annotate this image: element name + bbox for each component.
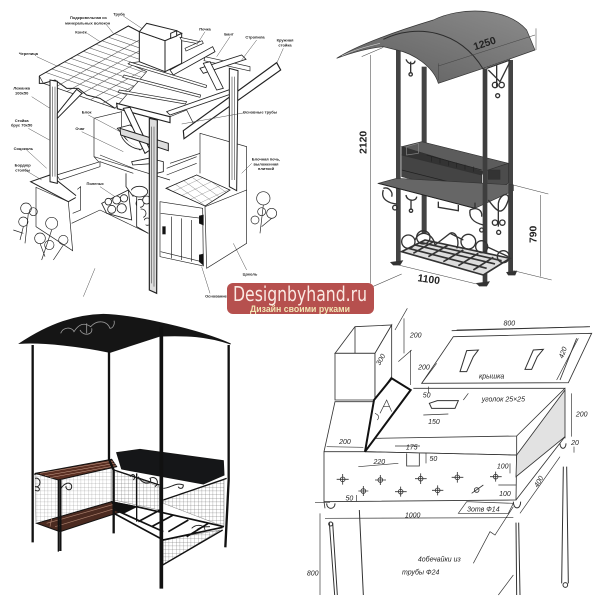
floor tile grid [166,175,230,206]
vent holes [337,472,502,497]
label: drawing callouts: стойка [278,42,292,47]
rear posts [396,50,513,273]
label: drawing callouts: Труба [113,11,126,16]
sketch dimension labels: 420 [558,346,569,359]
dimension labels [359,35,540,287]
sketch dimension labels: 50 [429,456,437,463]
sketch dimension labels: 220 [373,459,385,466]
walls and brick base [57,110,247,268]
mesh panels [35,460,224,565]
panel: hand-drawn grill blueprint [307,308,592,595]
sketch dimension labels: 175 [406,444,418,451]
label: drawing callouts: Лежанка [13,85,31,90]
label: drawing callouts: Поленья [86,181,104,186]
sketch dimension labels: 300 [375,353,387,367]
label: drawing callouts: Подкровельная из [70,15,107,20]
wrought iron scrolls [383,59,510,234]
grill box [117,449,224,484]
sketch dimension labels: 400 [533,475,545,489]
label: drawing callouts: 100х50 [15,91,29,96]
foot plates [391,261,517,286]
legs [327,443,568,595]
lid with handles [422,327,592,383]
label: drawing callouts: Основные трубы [243,109,278,114]
side shelf [378,178,513,211]
dimension lines [362,28,552,287]
label: drawing callouts: минеральных волокон [65,21,111,26]
sketch dimension labels: 200 [417,364,430,371]
label: drawing callouts: плиткой [258,166,275,171]
lower rack [114,507,224,540]
canopy roof [337,11,535,83]
dimension labels: 1250 [472,35,498,53]
left pedestal [31,175,81,251]
callout lines [25,16,283,297]
panel: metal grill with canopy and dimensions [337,11,552,287]
label: drawing callouts: Бант [224,31,234,36]
panel: black gazebo grill photo [20,314,231,589]
sketch dimension labels: уголок 25×25 [481,396,525,403]
sketch dimension labels: 100 [499,491,511,498]
flowers [13,192,277,260]
timber posts and braces [50,68,238,293]
sketch dimension labels: крышка [479,374,504,381]
label: drawing callouts [11,11,294,299]
panel: gazebo construction drawing [11,11,294,299]
sketch dimension labels: 50 [345,496,353,503]
funnel marks [375,400,392,420]
sketch dimension labels [307,320,588,577]
sketch dimension labels: 800 [504,320,515,327]
sketch dimension labels: 200 [575,412,588,419]
label: drawing callouts: Соцоколь [14,146,34,151]
dimension labels: 2120 [359,131,370,154]
label: drawing callouts: Очаг [75,126,85,131]
sketch dimension labels: 20 [570,440,579,447]
sketch dimension labels: 3отв Ф14 [467,506,500,513]
site name: Designbyhand.ru [233,282,367,306]
label: drawing callouts: Кружная [277,38,294,43]
label: drawing callouts: Бордюр [15,163,31,168]
roof tiles [38,25,148,109]
rafters [117,47,281,139]
chimney [139,23,182,72]
sketch dimension labels: 4обечайки из [418,556,461,564]
sketch dimension labels: 200 [338,439,351,446]
label: drawing callouts: Стойка [15,118,29,123]
posts [33,327,229,589]
label: drawing callouts: столбы [15,168,31,173]
wooden door with hinges [160,202,203,266]
lower rack [402,231,510,275]
sketch dimension labels: 150 [428,419,440,426]
firewood stack [102,173,151,233]
label: drawing callouts: выложенная [253,161,279,166]
label: drawing callouts: Черепица [19,51,39,56]
front posts [483,68,513,283]
sketch dimension labels: трубы Ф24 [402,568,439,576]
label: drawing callouts: Цоколь [243,271,258,276]
chimney [335,325,392,400]
label: drawing callouts: Блочная печь, [252,157,280,162]
canopy roof [20,314,231,352]
brazier body [324,388,565,508]
sketch dimension labels: 1000 [405,512,421,519]
dimension labels: 1100 [417,273,441,287]
label: drawing callouts: Основание [205,294,228,299]
sketch dimension labels: 800 [307,570,319,577]
label: drawing callouts: брус 70х50 [11,123,33,128]
sketch dimension labels: 100 [497,463,509,470]
logo badge [227,282,374,315]
sketch dimension labels: 200 [409,333,422,340]
label: drawing callouts: Блок [82,109,92,114]
dimension labels: 790 [529,225,540,243]
hood and hearth [117,125,163,173]
tagline: Дизайн своими руками [250,304,350,315]
dimension lines [315,308,588,595]
roof battens [118,37,250,104]
sketch dimension labels: 50 [423,393,431,400]
wooden shelves [35,459,137,532]
label: drawing callouts: Конёк [75,29,87,34]
grill brazier [402,142,508,197]
funnel [365,378,411,452]
label: drawing callouts: Печка [199,27,212,32]
label: drawing callouts: Стропила [245,34,265,39]
ornamental scrolls [35,475,183,493]
angle bracket [429,401,458,408]
rails [35,470,227,565]
